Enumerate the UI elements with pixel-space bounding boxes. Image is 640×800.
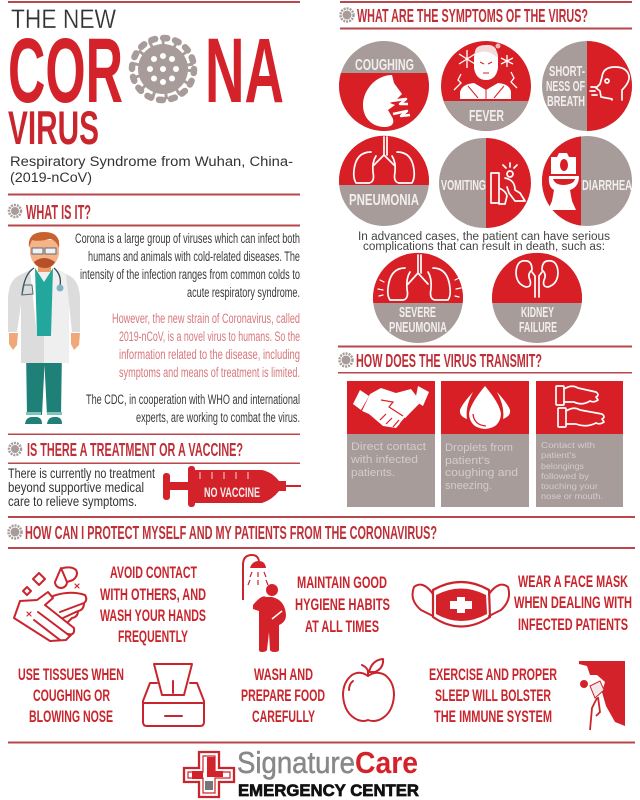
- tip: avoid contact: WITH OTHERS, AND: [100, 585, 206, 604]
- complication: kidney failure: KIDNEY: [521, 304, 554, 321]
- text: what is it: symptoms and means of treatment is limited.: [119, 365, 300, 380]
- icon: apple: [343, 659, 394, 721]
- scrubs: [35, 268, 53, 336]
- icon: hands: [556, 386, 604, 427]
- icon: syringe: NO VACCINE: [204, 484, 260, 500]
- text: what is it: acute respiratory syndrome.: [187, 285, 300, 300]
- symptom: diarrhea: [542, 136, 632, 226]
- text: what is it: The CDC, in cooperation with WHO and international: [86, 392, 300, 407]
- icon: syringe: [163, 466, 301, 507]
- card: direct contact: Direct contact: [351, 441, 426, 453]
- card: belongings: patient's: [541, 450, 576, 460]
- text: what is it: information related to the disease, including: [119, 347, 300, 362]
- logo: signature care: Care: [355, 745, 418, 780]
- logo: signature care: Signature: [237, 745, 355, 780]
- icon: climber: [579, 661, 625, 730]
- text: what is it: humans and animals with cold-related diseases. The: [88, 249, 300, 264]
- icon: shower and person: [243, 555, 286, 652]
- symptom: pneumonia: [339, 136, 429, 226]
- card: belongings: nose or mouth.: [541, 491, 603, 501]
- illustration: doctor: [8, 232, 80, 424]
- text: what is it: Corona is a large group of viruses which can infect both: [75, 231, 300, 246]
- logo: signature care: EMERGENCY CENTER: [238, 781, 419, 800]
- symptom: shortness of breath: BREATH: [547, 93, 585, 110]
- heading: protect: [8, 523, 437, 543]
- icon: cross: [184, 752, 234, 797]
- card: droplets: sneezing.: [445, 480, 492, 492]
- icon: mask: [413, 582, 509, 626]
- card: droplets: patient's: [445, 455, 491, 467]
- tip: food: CAREFULLY: [252, 707, 315, 726]
- heading: treatment or vaccine: [9, 440, 243, 460]
- tip: food: [241, 659, 394, 726]
- card: droplets: Droplets from: [445, 442, 513, 454]
- symptom: vomiting: VOMITING: [441, 177, 486, 194]
- text: what is it: 2019-nCoV, is a novel virus to humans. So the: [119, 329, 300, 344]
- heading: transmit: [340, 351, 542, 371]
- heading: what is it: WHAT IS IT?: [26, 202, 91, 224]
- complication: severe pneumonia: [373, 253, 463, 343]
- card: direct contact: patients.: [351, 467, 395, 479]
- tip: hygiene: HYGIENE HABITS: [295, 595, 390, 614]
- card: belongings: followed by: [541, 471, 590, 481]
- text: what is it: experts, are working to combat the virus.: [136, 410, 300, 425]
- stethoscope: [22, 268, 60, 295]
- symptom: coughing: COUGHING: [355, 57, 414, 74]
- title: [8, 4, 284, 154]
- text: advanced cases: [358, 231, 610, 253]
- icon: washing hands: [14, 567, 86, 641]
- text: no treatment: beyond supportive medical: [8, 479, 144, 495]
- text: no treatment: care to relieve symptoms.: [8, 493, 137, 509]
- text: advanced cases: In advanced cases, the patient can have serious: [358, 231, 610, 243]
- tip: avoid contact: WASH YOUR HANDS: [100, 606, 206, 625]
- icon: handshake: [353, 386, 429, 428]
- symptom: fever: FEVER: [469, 108, 504, 125]
- symptom: vomiting: [439, 138, 531, 228]
- title: NA: NA: [205, 20, 284, 122]
- icon: tissue box: [143, 664, 204, 726]
- hands: [9, 333, 80, 350]
- icon: droplets: [460, 386, 510, 429]
- subtitle: [10, 154, 293, 185]
- legs: [26, 350, 62, 415]
- tip: exercise and sleep: THE IMMUNE SYSTEM: [434, 707, 552, 726]
- card: direct contact: [347, 381, 435, 507]
- complication: kidney failure: FAILURE: [519, 319, 557, 336]
- neck and head: [38, 258, 51, 272]
- heading: treatment or vaccine: IS THERE A TREATMENT OR A VACCINE?: [27, 440, 243, 460]
- card: belongings: touching your: [541, 481, 598, 491]
- title: the new: THE NEW: [11, 4, 116, 34]
- text: what is it: intensity of the infection ranges from common colds to: [80, 267, 300, 282]
- icon: coronavirus: [132, 38, 194, 100]
- tip: exercise and sleep: [429, 661, 625, 730]
- tip: tissues: USE TISSUES WHEN: [18, 665, 124, 684]
- complication: severe pneumonia: PNEUMONIA: [389, 319, 447, 336]
- tip: avoid contact: [14, 563, 206, 646]
- symptom: shortness of breath: [542, 41, 632, 131]
- tip: food: WASH AND: [254, 665, 313, 684]
- tip: exercise and sleep: EXERCISE AND PROPER: [429, 665, 557, 684]
- card: direct contact: with infected: [350, 454, 418, 466]
- coat: [8, 270, 80, 363]
- tip: avoid contact: FREQUENTLY: [118, 627, 188, 646]
- tip: face mask: [413, 572, 632, 634]
- text: advanced cases: complications that can result in death, such as:: [363, 241, 605, 253]
- tip: hygiene: AT ALL TIMES: [305, 617, 379, 636]
- text: no treatment: There is currently no treatment: [8, 465, 155, 481]
- heading: what is it: [9, 202, 91, 224]
- tip: tissues: [18, 664, 204, 726]
- card: droplets: coughing and: [445, 467, 518, 479]
- tip: hygiene: [243, 555, 390, 652]
- tip: exercise and sleep: SLEEP WILL BOLSTER: [435, 686, 551, 705]
- card: belongings: belongings: [541, 461, 584, 471]
- text: no treatment: [8, 465, 155, 509]
- tip: tissues: COUGHING OR: [33, 686, 110, 705]
- logo: signature care: [184, 745, 419, 800]
- symptom: shortness of breath: SHORT-: [549, 63, 585, 80]
- symptom: fever: [441, 41, 531, 131]
- text: what is it: [75, 231, 300, 425]
- complication: severe pneumonia: SEVERE: [399, 304, 436, 321]
- tip: tissues: BLOWING NOSE: [29, 707, 113, 726]
- symptom: coughing: [339, 41, 429, 131]
- subtitle: (2019-nCoV): [10, 170, 92, 185]
- subtitle: Respiratory Syndrome from Wuhan, China-: [10, 154, 293, 169]
- symptom: pneumonia: PNEUMONIA: [349, 192, 419, 209]
- tip: avoid contact: AVOID CONTACT: [110, 563, 197, 582]
- complication: kidney failure: [492, 253, 582, 343]
- card: belongings: [536, 381, 623, 507]
- card: droplets: [441, 381, 529, 507]
- tip: food: PREPARE FOOD: [241, 686, 325, 705]
- card: belongings: Contact with: [541, 440, 595, 450]
- symptom: shortness of breath: NESS OF: [546, 78, 585, 95]
- title: virus: VIRUS: [8, 101, 99, 154]
- text: what is it: However, the new strain of Coronavirus, called: [112, 311, 300, 326]
- tip: hygiene: MAINTAIN GOOD: [297, 573, 387, 592]
- title: COR: COR: [8, 20, 123, 122]
